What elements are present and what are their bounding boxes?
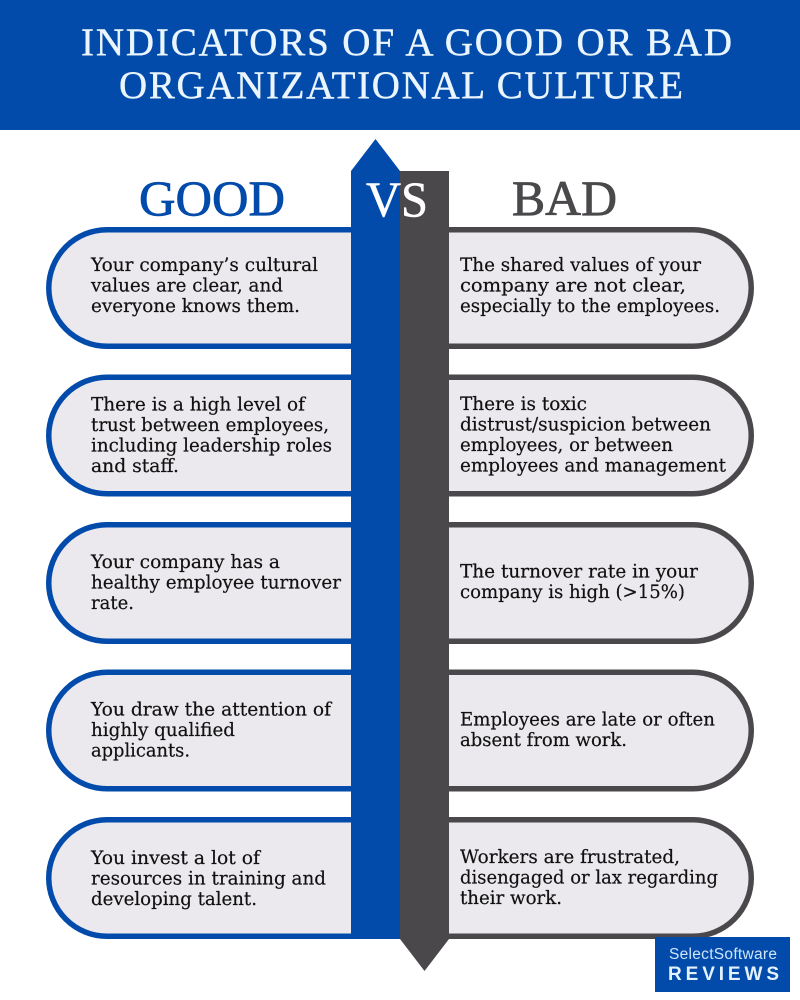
panel: bad 2 xyxy=(425,377,751,494)
panel: good 1: Your company’s cultural xyxy=(90,254,318,276)
panel: good 3: healthy employee turnover xyxy=(91,572,342,594)
panel: bad 1: especially to the employees. xyxy=(460,295,720,317)
panel: bad 1: The shared values of your xyxy=(460,254,702,276)
panel: bad 4 xyxy=(425,672,751,789)
panel: bad 4: absent from work. xyxy=(460,729,627,751)
panel: good 3 xyxy=(49,525,375,641)
heading: bad: BAD xyxy=(512,170,617,226)
panel: bad 1 xyxy=(425,230,751,346)
panel: good 4: You draw the attention of xyxy=(90,698,333,720)
panel: good 2: trust between employees, xyxy=(91,414,329,436)
panel: bad 2: There is toxic xyxy=(460,393,587,415)
panel: bad 3 xyxy=(425,525,751,641)
panel: good 4 xyxy=(49,672,375,789)
panel: good 5: resources in training and xyxy=(91,868,326,890)
panel: good 3: rate. xyxy=(91,592,134,614)
panel: good 3: Your company has a xyxy=(90,551,280,573)
title banner xyxy=(0,0,800,130)
title banner: ORGANIZATIONAL CULTURE xyxy=(119,64,683,107)
panel: bad 3: The turnover rate in your xyxy=(460,560,699,582)
panel: good 2: including leadership roles xyxy=(91,434,332,456)
panel: bad 5: disengaged or lax regarding xyxy=(460,866,718,888)
panel: good 2: and staff. xyxy=(91,455,179,477)
panel: bad 5: their work. xyxy=(460,887,562,909)
logo badge: REVIEWS xyxy=(668,964,779,985)
panel: good 4: applicants. xyxy=(91,740,190,762)
panel: good 5: developing talent. xyxy=(91,888,257,910)
panel: bad 1: company are not clear, xyxy=(460,274,686,296)
logo badge xyxy=(655,937,790,992)
logo badge: SelectSoftware xyxy=(669,946,777,963)
panel: bad 5: Workers are frustrated, xyxy=(460,846,680,868)
panel: good 2 xyxy=(49,377,375,494)
arrow: gray down xyxy=(400,171,449,971)
vs label: VS xyxy=(366,171,428,227)
panel: bad 2: employees, or between xyxy=(460,434,673,456)
panel: bad 2: employees and management xyxy=(460,454,726,476)
arrow: blue up xyxy=(351,139,400,939)
panel: bad 3: company is high (>15%) xyxy=(460,581,685,603)
panel: bad 2: distrust/suspicion between xyxy=(460,414,711,436)
panel: bad 4: Employees are late or often xyxy=(460,708,715,730)
panel: bad 5 xyxy=(425,820,751,936)
panel: good 1 xyxy=(49,230,375,346)
heading: good: GOOD xyxy=(139,170,285,226)
panel: good 5 xyxy=(49,820,375,936)
panel: good 1: values are clear, and xyxy=(90,274,283,296)
panel: good 4: highly qualified xyxy=(91,719,235,741)
panel: good 1: everyone knows them. xyxy=(91,295,300,317)
title banner: INDICATORS OF A GOOD OR BAD xyxy=(81,21,732,64)
panel: good 5: You invest a lot of xyxy=(90,847,262,869)
panel: good 2: There is a high level of xyxy=(91,394,307,416)
